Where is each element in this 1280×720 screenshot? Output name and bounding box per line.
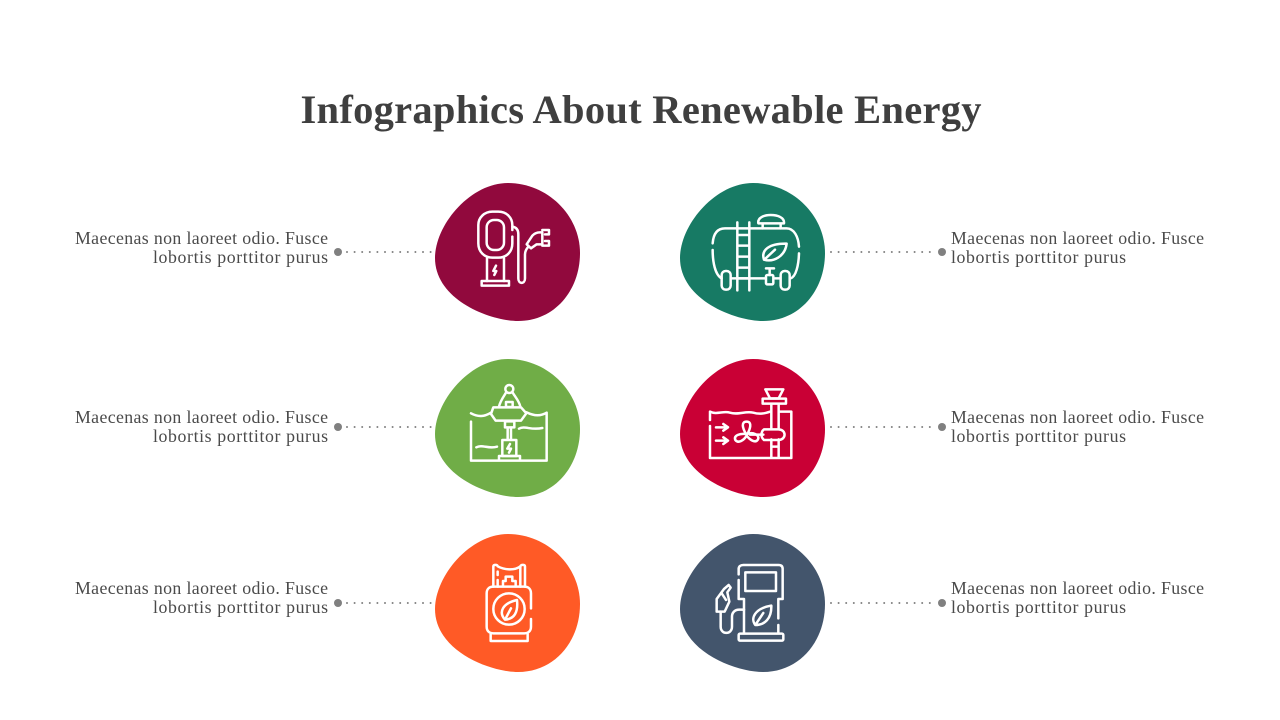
connector: top right <box>831 248 946 256</box>
text block: top right: Maecenas non laoreet odio. Fusce <box>951 228 1204 248</box>
text block: bottom right <box>951 578 1204 617</box>
icon: water turbine <box>710 389 791 458</box>
text block: bottom right: lobortis porttitor purus <box>951 597 1126 617</box>
icon: bio tank <box>713 215 799 290</box>
panel: top right item <box>680 183 1204 321</box>
connector: bottom left <box>334 599 431 607</box>
blob: green <box>435 359 580 497</box>
text block: bottom left: lobortis porttitor purus <box>153 597 328 617</box>
icon: EV charger <box>478 212 549 286</box>
panel: top left item <box>75 183 580 321</box>
text block: top left <box>75 228 328 267</box>
text block: middle right: Maecenas non laoreet odio. Fusce <box>951 407 1204 427</box>
title: Infographics About Renewable Energy <box>300 87 982 132</box>
text block: middle left: lobortis porttitor purus <box>153 426 328 446</box>
text block: middle left: Maecenas non laoreet odio. Fusce <box>75 407 328 427</box>
connector: middle right <box>831 423 946 431</box>
connector: bottom right <box>831 599 946 607</box>
blob: slate <box>680 534 825 672</box>
panel: bottom right item <box>680 534 1204 672</box>
text block: top right <box>951 228 1204 267</box>
text block: top left: lobortis porttitor purus <box>153 247 328 267</box>
text block: top right: lobortis porttitor purus <box>951 247 1126 267</box>
icon: fuel pump <box>717 565 783 641</box>
text block: bottom right: Maecenas non laoreet odio. Fusce <box>951 578 1204 598</box>
text block: middle right: lobortis porttitor purus <box>951 426 1126 446</box>
connector: top left <box>334 248 431 256</box>
text block: top left: Maecenas non laoreet odio. Fusce <box>75 228 328 248</box>
text block: bottom left <box>75 578 328 617</box>
blob: teal <box>680 183 825 321</box>
panel: middle right item <box>680 359 1204 497</box>
icon: tidal buoy <box>471 385 547 461</box>
text block: bottom left: Maecenas non laoreet odio. Fusce <box>75 578 328 598</box>
text block: middle right <box>951 407 1204 446</box>
icon: gas cylinder <box>487 565 531 641</box>
panel: middle left item <box>75 359 580 497</box>
text block: middle left <box>75 407 328 446</box>
blob: crimson <box>435 183 580 321</box>
blob: red <box>680 359 825 497</box>
blob: orange <box>435 534 580 672</box>
panel: bottom left item <box>75 534 580 672</box>
connector: middle left <box>334 423 431 431</box>
